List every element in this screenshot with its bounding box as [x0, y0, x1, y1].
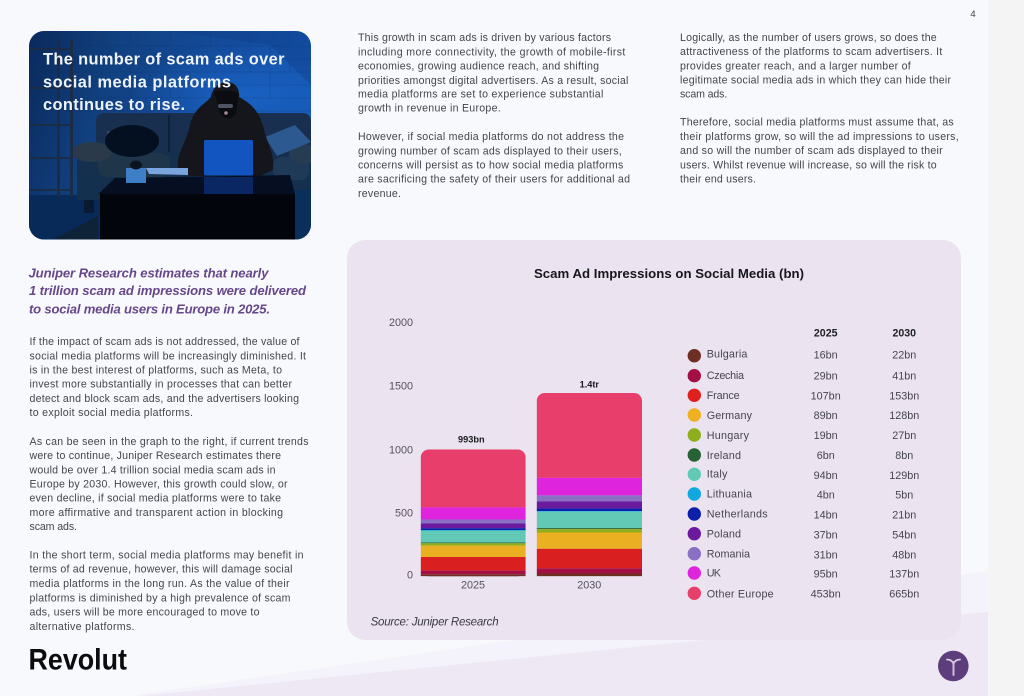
chart title: Scam Ad Impressions on Social Media (bn): [534, 266, 804, 281]
legend row: Hungary: 27bn: [892, 430, 916, 442]
footer wave: light band: [130, 571, 988, 696]
shelf: [29, 40, 73, 197]
text block: left paragraph 3: alternative platforms.: [30, 621, 134, 633]
legend row: UK: 95bn: [814, 569, 838, 581]
legend row: Italy: [688, 468, 919, 482]
legend row: France: France: [707, 390, 740, 402]
y axis labels: 0: [407, 570, 413, 582]
legend row: Germany: Germany: [707, 410, 753, 422]
plant and papers: [146, 168, 188, 175]
text block: middle column: including more connectivity, the growth of mobile-first: [358, 46, 625, 58]
legend row: UK: 137bn: [889, 569, 919, 581]
legend row: Ireland: Ireland: [707, 450, 741, 462]
legend row: Czechia: 41bn: [892, 371, 916, 383]
legend row: Poland: [688, 527, 916, 541]
text block: middle column: economies, growing audience reach, and shifting: [358, 61, 599, 73]
y axis labels: [389, 317, 413, 582]
legend row: Other Europe: 453bn: [811, 588, 841, 600]
legend row: Romania: Romania: [707, 549, 750, 561]
legend row: Germany: 89bn: [814, 410, 838, 422]
legend row: UK: [688, 566, 919, 581]
legend row: UK: UK: [707, 568, 722, 580]
text block: left paragraph 1: social media platforms will be increasingly diminished. It: [30, 350, 306, 362]
text block: left paragraph 3: platforms is diminished by a high prevalence of scam: [30, 592, 291, 604]
source note: Source: Juniper Research: [371, 617, 499, 629]
legend row: Poland: 37bn: [814, 529, 838, 541]
text block: middle column: growth in revenue in Europe.: [358, 103, 501, 115]
text block: right column: users. Whilst revenue will increase, so will the risk to: [680, 159, 937, 171]
legend table headers: [814, 327, 916, 339]
legend row: Other Europe: 665bn: [889, 588, 919, 600]
text block: middle column: growing number of scam ads displayed to their users,: [358, 145, 622, 157]
y axis labels: 2000: [389, 317, 413, 329]
legend row: Other Europe: [688, 587, 919, 600]
legend row: Poland: 54bn: [892, 529, 916, 541]
x axis labels: [461, 580, 601, 592]
text block: left paragraph 1: detect and block scam ads, and the advertisers looking: [30, 393, 299, 405]
text block: left paragraph 2: would be over 1.4 trillion social media scam ads in: [28, 464, 276, 476]
legend row: France: 107bn: [811, 391, 841, 403]
x axis labels: 2030: [577, 580, 601, 592]
callout heading: 1 trillion scam ads: to social media users in Europe in 2025.: [29, 301, 270, 316]
text block: left paragraph 3: media platforms in the long run. As the value of their: [30, 578, 290, 590]
page number: 4: [970, 9, 976, 20]
legend row: Other Europe: Other Europe: [707, 588, 774, 600]
table: [98, 175, 295, 194]
text block: left paragraph 2: even decline, if social media platforms were to take: [30, 493, 281, 505]
text block: right column: their platforms grow, so will the ad impressions to users,: [680, 131, 959, 143]
floor: [29, 195, 104, 240]
bar total labels: [458, 380, 599, 445]
legend row: Ireland: 6bn: [817, 450, 835, 462]
footer wave: lavender band: [140, 612, 988, 696]
text block: left paragraph 2: were to continue, Juniper Research estimates there: [28, 450, 281, 462]
legend row: Lithuania: 4bn: [817, 490, 835, 502]
bar total labels: 993bn: [458, 435, 485, 445]
legend table headers: 2025: [814, 327, 838, 339]
legend row: Lithuania: Lithuania: [707, 489, 752, 501]
legend row: Hungary: 19bn: [814, 430, 838, 442]
text block: right column: their end users.: [680, 174, 756, 186]
text block: right column: Therefore, social media platforms must assume that, as: [680, 117, 954, 129]
legend row: Bulgaria: [688, 348, 916, 362]
legend row: Romania: 48bn: [892, 549, 916, 561]
text block: right column: scam ads.: [680, 88, 727, 100]
image headline: The number of scam ads over: [43, 50, 285, 68]
legend row: Germany: 128bn: [889, 410, 919, 422]
callout heading: 1 trillion scam ads: Juniper Research estimates that nearly: [28, 265, 269, 280]
image headline: continues to rise.: [43, 96, 185, 114]
text block: right column: Logically, as the number of users grows, so does the: [680, 32, 937, 44]
logo: Revolut: Revolut: [28, 643, 127, 676]
illustration: hooded scammer at laptop: [29, 31, 317, 240]
text block: right column: [680, 32, 959, 186]
y axis labels: 500: [395, 508, 413, 520]
text block: middle column: revenue.: [358, 188, 401, 200]
legend row: Romania: 31bn: [814, 549, 838, 561]
text block: left paragraph 1: If the impact of scam ads is not addressed, the value of: [30, 336, 300, 348]
callout heading: 1 trillion scam ads: 1 trillion scam ad impressions were delivered: [29, 283, 307, 298]
text block: left paragraph 2: [28, 436, 308, 533]
sofa: [96, 113, 311, 152]
bar total labels: 1.4tr: [580, 380, 599, 390]
x axis labels: 2025: [461, 580, 485, 592]
icon: Juniper Research logo: [938, 651, 969, 681]
text block: left paragraph 3: [30, 549, 304, 633]
text block: left paragraph 1: invest more substantially in processes that can better: [30, 379, 292, 391]
legend row: Lithuania: 5bn: [895, 490, 913, 502]
text block: middle column: priorities amongst digital advertisers. As a result, social: [358, 75, 628, 87]
legend row: Romania: [688, 547, 916, 561]
image headline: [43, 50, 285, 114]
image headline: social media platforms: [43, 73, 231, 91]
legend row: Czechia: [688, 369, 916, 383]
text block: left paragraph 1: to exploit social media platforms.: [30, 407, 193, 419]
legend row: Netherlands: 14bn: [814, 509, 838, 521]
legend row: France: [688, 389, 919, 403]
text block: middle column: However, if social media platforms do not address the: [358, 131, 624, 143]
stacked bar: 2025: [421, 449, 526, 576]
y axis labels: 1000: [389, 444, 413, 456]
legend row: Ireland: [688, 448, 913, 462]
legend row: Netherlands: [688, 507, 916, 521]
legend row: Italy: 94bn: [814, 470, 838, 482]
legend table headers: 2030: [893, 327, 916, 339]
text block: left paragraph 3: terms of ad revenue, however, this will damage social: [30, 564, 292, 576]
legend row: Bulgaria: Bulgaria: [707, 348, 747, 360]
text block: right column: provides greater reach, and a larger number of: [680, 60, 911, 72]
legend row: Poland: Poland: [707, 529, 741, 541]
text block: left paragraph 2: scam ads.: [30, 521, 77, 533]
text block: middle column: are sacrificing the safety of their users for additional ad: [358, 174, 630, 186]
text block: right column: and so will the number of scam ads displayed to their: [680, 145, 943, 157]
legend row: Czechia: Czechia: [707, 370, 744, 382]
legend row: Hungary: [688, 428, 916, 442]
legend row: Italy: Italy: [707, 469, 728, 481]
text block: middle column: [358, 32, 630, 200]
legend row: Bulgaria: 16bn: [814, 349, 838, 361]
text block: left paragraph 1: is in the best interest of platforms, such as Meta, to: [30, 364, 282, 376]
text block: middle column: media platforms are set to experience substantial: [358, 88, 603, 100]
text block: left paragraph 3: ads, users will be more encouraged to move to: [30, 607, 260, 619]
legend row: Netherlands: 21bn: [892, 509, 916, 521]
right margin strip: [988, 0, 1024, 696]
legend row: Netherlands: Netherlands: [707, 509, 768, 521]
panel: hero image with headline: [29, 31, 317, 240]
legend row: France: 153bn: [889, 391, 919, 403]
legend row: Ireland: 8bn: [895, 450, 913, 462]
stacked bar: 2030: [537, 393, 642, 576]
text block: middle column: This growth in scam ads is driven by various factors: [358, 32, 611, 44]
legend row: Bulgaria: 22bn: [892, 349, 916, 361]
legend row: Hungary: Hungary: [707, 430, 750, 442]
legend row: Italy: 129bn: [889, 470, 919, 482]
y axis labels: 1500: [389, 380, 413, 392]
text block: left paragraph 2: more affirmative and transparent action in blocking: [30, 507, 283, 519]
text block: left paragraph 2: Europe by 2030. However, this growth could slow, or: [30, 478, 288, 490]
legend row: Germany: [688, 408, 919, 422]
figure: [178, 82, 273, 176]
text block: right column: legitimate social media ads in which they can hide their: [680, 75, 951, 87]
legend row: Lithuania: [688, 487, 913, 502]
legend row: Czechia: 29bn: [814, 371, 838, 383]
text block: left paragraph 2: As can be seen in the graph to the right, if current trends: [30, 436, 308, 448]
callout heading: 1 trillion scam ads: [28, 265, 307, 316]
laptop: [204, 140, 253, 176]
panel: chart card: [347, 240, 961, 640]
text block: middle column: concerns will persist as to how social media platforms: [358, 159, 623, 171]
text block: left paragraph 1: [30, 336, 306, 419]
text block: right column: attractiveness of the platforms to scam advertisers. It: [680, 46, 942, 58]
text block: left paragraph 3: In the short term, social media platforms may benefit in: [30, 549, 304, 561]
